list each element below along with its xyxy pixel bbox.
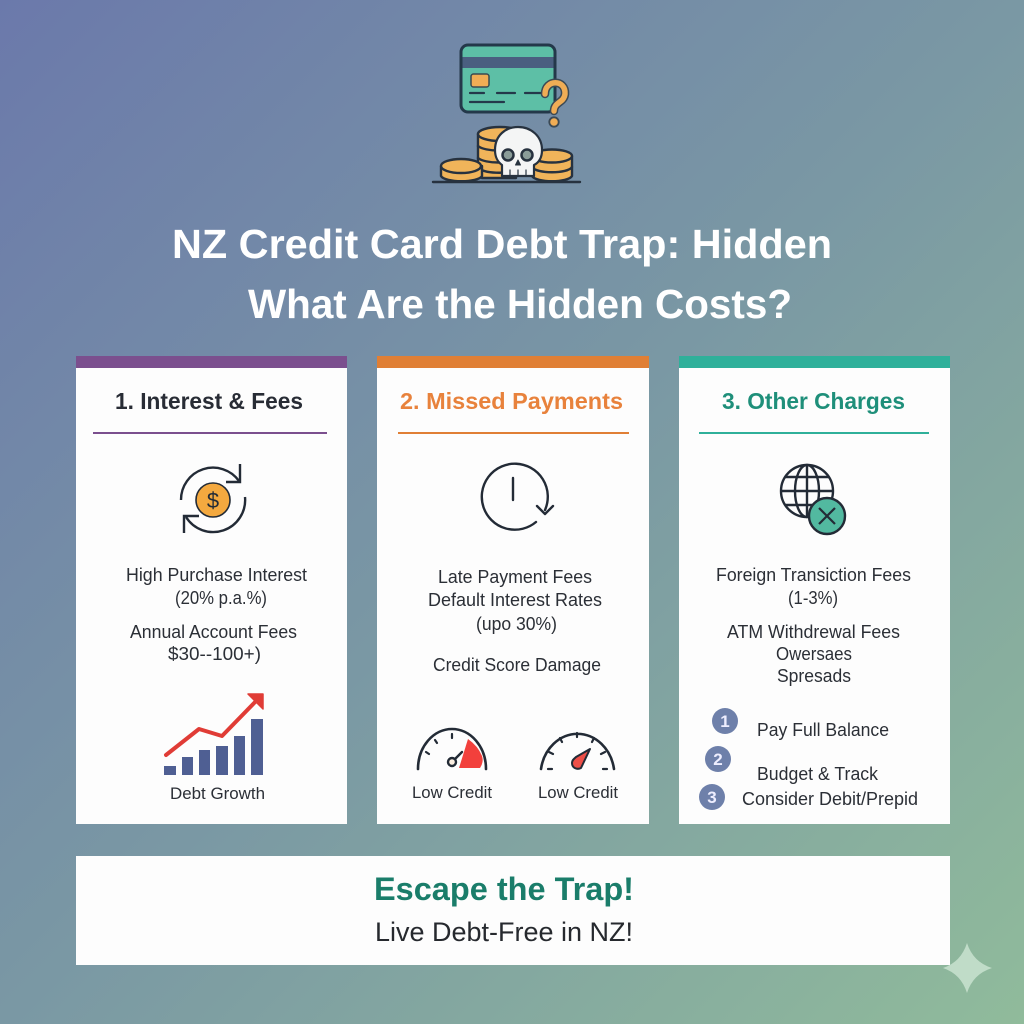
chart: debt growth: Debt Growth: [170, 784, 265, 803]
text: other charges details: [716, 565, 911, 686]
list: escape steps: [699, 708, 918, 810]
heading: missed payments: 2. Missed Payments: [400, 388, 623, 414]
icon: skull: [495, 127, 542, 176]
text: other charges details: Spresads: [777, 666, 851, 686]
icon: gauge right: [538, 733, 618, 802]
text: other charges details: Foreign Transiction Fees: [716, 565, 911, 585]
text: interest details: High Purchase Interest: [126, 565, 307, 585]
title: [172, 221, 832, 327]
text: missed payment details: Credit Score Damage: [433, 655, 601, 675]
panel: other charges: [679, 356, 950, 824]
label: low credit: Low Credit: [538, 783, 618, 802]
label: low credit: Low Credit: [412, 783, 492, 802]
icon: gauge left: [412, 729, 492, 802]
icon: question mark: [545, 83, 565, 127]
ground line: [433, 181, 580, 183]
text: other charges details: (1-3%): [788, 588, 838, 608]
text: interest details: Annual Account Fees: [130, 622, 297, 642]
title: NZ Credit Card Debt Trap: Hidden: [172, 221, 832, 267]
icon: gold coin stacks: [441, 127, 572, 181]
heading: escape the trap: Escape the Trap!: [374, 871, 634, 907]
chart: debt growth: [164, 694, 265, 803]
list: escape steps: Consider Debit/Prepid: [742, 789, 918, 809]
text: missed payment details: [428, 567, 602, 675]
icon: credit card, coins and skull: [433, 45, 580, 182]
icon: circular dollar: $: [207, 488, 219, 513]
text: interest details: (20% p.a.%): [175, 588, 267, 608]
panel: missed payments: [377, 356, 649, 824]
text: interest details: [126, 565, 307, 664]
text: other charges details: Owersaes: [776, 644, 852, 664]
panel: interest and fees: [76, 356, 347, 824]
icon: globe with cross: [781, 465, 845, 534]
text: other charges details: ATM Withdrewal Fees: [727, 622, 900, 642]
title: What Are the Hidden Costs?: [248, 281, 792, 327]
heading: interest and fees: 1. Interest & Fees: [115, 388, 303, 414]
icon: sparkle: [943, 943, 992, 993]
text: interest details: $30--100+): [168, 644, 261, 664]
text: missed payment details: Default Interest Rates: [428, 590, 602, 610]
list: escape steps: 2: [713, 750, 723, 769]
icon: credit card: [461, 45, 555, 112]
list: escape steps: Budget & Track: [757, 764, 879, 784]
heading: other charges: 3. Other Charges: [722, 388, 905, 414]
list: escape steps: 1: [720, 712, 730, 731]
list: escape steps: Pay Full Balance: [757, 720, 889, 740]
text: missed payment details: (upo 30%): [476, 614, 557, 634]
text: missed payment details: Late Payment Fees: [438, 567, 592, 587]
icon: clock with arrow: [482, 464, 553, 530]
list: escape steps: 3: [707, 788, 717, 807]
icon: circular dollar: [181, 464, 245, 533]
panel: call to action: [76, 856, 950, 965]
text: live debt-free: Live Debt-Free in NZ!: [375, 917, 633, 947]
